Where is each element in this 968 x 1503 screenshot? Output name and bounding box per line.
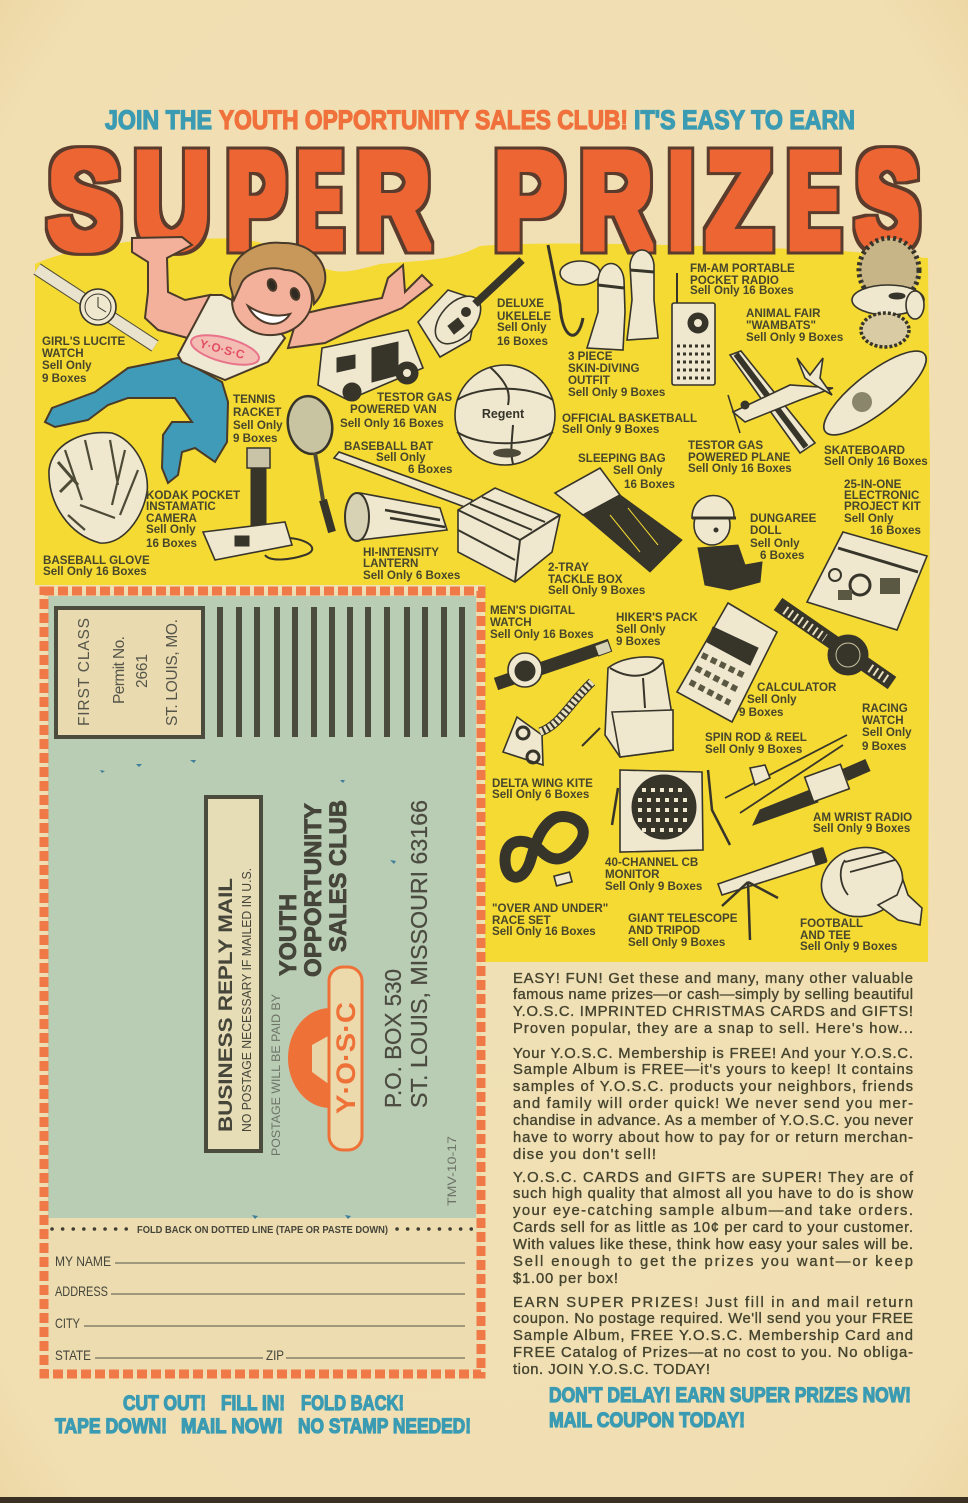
address: P.O. BOX 530 [380, 969, 406, 1108]
paragraph: membership: Sample Album is FREE—it's yours to keep! It contains [513, 1062, 913, 1078]
paragraph: cards and gifts: your eye-catching sample album—and take orders. [513, 1203, 913, 1219]
prize: men's digital watch: WATCH [490, 616, 532, 629]
paragraph: cards and gifts: Cards sell for as little as 10¢ per card to your customer. [513, 1220, 913, 1236]
paragraph: earn super prizes: FREE Catalog of Prizes—at no cost to you. No obliga- [513, 1345, 913, 1361]
form fields: ADDRESS [55, 1283, 108, 1299]
paragraph: easy fun: Proven popular, they are a snap to sell. Here's how... [513, 1021, 913, 1037]
prize: racing watch [778, 604, 912, 753]
prize: kodak pocket instamatic camera: CAMERA [146, 512, 198, 525]
form fields: MY NAME [55, 1253, 111, 1269]
prize: men's digital watch: Sell Only 16 Boxes [490, 628, 594, 641]
club name: OPPORTUNITY [300, 803, 327, 977]
prize: spin rod and reel [705, 731, 847, 813]
title: super prizes: P [494, 124, 564, 278]
paragraph: membership: samples of Y.O.S.C. products your neighbors, friends [513, 1079, 913, 1095]
prize: 3 piece skin-diving outfit [548, 245, 665, 399]
prize: men's digital watch [490, 604, 612, 687]
prize: hiker's pack [582, 611, 698, 757]
prize: testor gas powered van: TESTOR GAS [377, 391, 452, 404]
prize: 3 piece skin-diving outfit: 3 PIECE [568, 350, 613, 363]
prize: tennis racket: Sell Only [233, 419, 283, 432]
paragraph: easy fun [513, 971, 913, 1037]
prize: football and tee: AND TEE [800, 929, 851, 942]
prize: 2-tray tackle box: TACKLE BOX [548, 573, 623, 586]
club name: SALES CLUB [325, 800, 352, 952]
prize: men's digital watch: MEN'S DIGITAL [490, 604, 575, 617]
paragraph: membership: dise you don't sell! [513, 1147, 656, 1163]
prize: 40-channel cb monitor [605, 770, 730, 893]
prize: official basketball: Sell Only 9 Boxes [562, 423, 659, 436]
headline: join the club: IT'S EASY TO EARN [634, 105, 855, 135]
prize: giant telescope and tripod [628, 848, 827, 949]
prize: 25-in-one electronic project kit [807, 478, 927, 630]
panel: yellow prize background [35, 238, 930, 962]
prize: kodak pocket instamatic camera: 16 Boxes [146, 537, 197, 550]
prize: football and tee [800, 839, 922, 953]
prize: racing watch: RACING [862, 702, 908, 715]
prize: racing watch: Sell Only [862, 726, 912, 739]
prize: deluxe ukelele: Sell Only [497, 321, 547, 334]
business reply mail box [206, 797, 261, 1151]
paragraph: membership [513, 1046, 913, 1163]
paragraph: easy fun: Y.O.S.C. IMPRINTED CHRISTMAS CARDS and GIFTS! [513, 1004, 913, 1020]
prize: tennis racket [233, 393, 337, 532]
call to action [549, 1384, 911, 1432]
prize: deluxe ukelele: 16 Boxes [497, 335, 548, 348]
prize: hi-intensity lantern [345, 493, 460, 582]
paragraph: earn super prizes [513, 1295, 913, 1378]
prize: testor gas powered van: POWERED VAN [350, 403, 437, 416]
prize: dungaree doll: 6 Boxes [760, 549, 804, 562]
prize: 40-channel cb monitor: MONITOR [605, 868, 660, 881]
form fields: CITY [55, 1315, 81, 1331]
title: super prizes: Z [706, 124, 772, 278]
prize: baseball bat: 6 Boxes [408, 463, 452, 476]
prize: 3 piece skin-diving outfit: OUTFIT [568, 374, 610, 387]
prize: girl's lucite watch: Sell Only [42, 359, 92, 372]
paragraph: membership: Your Y.O.S.C. Membership is FREE! And your Y.O.S.C. [513, 1046, 913, 1062]
paragraph: membership: chandise in advance. As a member of Y.O.S.C. you never [513, 1113, 913, 1129]
coupon instructions: FILL IN! [221, 1392, 285, 1415]
prize: dungaree doll: DUNGAREE [750, 512, 817, 525]
mascot: leaping boy [45, 237, 432, 483]
paragraph: cards and gifts [513, 1170, 914, 1287]
prize: over and under race set: "OVER AND UNDER" [492, 902, 608, 915]
prize: giant telescope and tripod: AND TRIPOD [628, 924, 700, 937]
prize: racing watch: 9 Boxes [862, 740, 906, 753]
prize: 25-in-one electronic project kit: PROJECT KIT [844, 500, 921, 513]
prize: dungaree doll [692, 496, 817, 590]
prize: girl's lucite watch: GIRL'S LUCITE [42, 335, 126, 348]
prize: football and tee: FOOTBALL [800, 917, 863, 930]
paragraph: membership: have to worry about how to pay for or return merchan- [513, 1130, 913, 1146]
paragraph: cards and gifts: Sell enough to get the prizes you want—or keep [513, 1254, 913, 1270]
coupon instructions [55, 1392, 471, 1438]
title: super prizes: E [298, 124, 342, 278]
prize: am wrist radio: AM WRIST RADIO [813, 811, 912, 824]
prize: testor gas powered van: Sell Only 16 Boxes [340, 417, 444, 430]
logo: y.o.s.c.: Y·O·S·C [331, 1002, 361, 1114]
prize: 40-channel cb monitor: Sell Only 9 Boxes [605, 880, 702, 893]
prize: spin rod and reel: Sell Only 9 Boxes [705, 743, 802, 756]
prize: kodak pocket instamatic camera: INSTAMATIC [146, 500, 216, 513]
paragraph: earn super prizes: Sample Album, FREE Y.O.S.C. Membership Card and [513, 1328, 913, 1344]
prize: over and under race set: RACE SET [492, 914, 551, 927]
permit box: 2661 [134, 654, 151, 688]
postage line: POSTAGE WILL BE PAID BY [271, 994, 283, 1156]
prize: hi-intensity lantern: HI-INTENSITY [363, 546, 439, 559]
prize: delta wing kite [492, 682, 593, 801]
call to action: MAIL COUPON TODAY! [549, 1409, 745, 1432]
prize: calculator: CALCULATOR [757, 681, 837, 694]
prize: 25-in-one electronic project kit: 25-IN-ONE [844, 478, 902, 491]
coupon instructions: CUT OUT! [123, 1392, 206, 1415]
prize: fm-am portable pocket radio [672, 262, 795, 385]
prize: skateboard [813, 338, 937, 468]
headline: join the club: YOUTH OPPORTUNITY SALES CLUB! [219, 105, 628, 135]
prize: 25-in-one electronic project kit: ELECTRONIC [844, 489, 920, 502]
fold line instruction: FOLD BACK ON DOTTED LINE (TAPE OR PASTE DOWN) [137, 1224, 388, 1236]
prize: baseball bat: Sell Only [376, 451, 426, 464]
prize: sleeping bag: SLEEPING BAG [578, 452, 666, 465]
prize: hiker's pack: Sell Only [616, 623, 666, 636]
prize: testor gas powered plane: POWERED PLANE [688, 451, 791, 464]
prize: fm-am portable pocket radio: Sell Only 16 Boxes [690, 284, 794, 297]
prize: giant telescope and tripod: GIANT TELESCOPE [628, 912, 738, 925]
form fields [55, 1253, 465, 1363]
prize: sleeping bag: 16 Boxes [624, 478, 675, 491]
prize: dungaree doll: Sell Only [750, 537, 800, 550]
prize: calculator: Sell Only [747, 693, 797, 706]
prize: delta wing kite: Sell Only 6 Boxes [492, 788, 589, 801]
prize: 25-in-one electronic project kit: Sell Only [844, 512, 894, 525]
club name: YOUTH [275, 894, 302, 976]
prize: testor gas powered plane [688, 351, 833, 475]
business reply mail box: NO POSTAGE NECESSARY IF MAILED IN U.S. [240, 868, 254, 1132]
form fields: STATE [55, 1347, 91, 1363]
paragraph: earn super prizes: EARN SUPER PRIZES! Just fill in and mail return [513, 1295, 913, 1311]
prize: kodak pocket instamatic camera: KODAK POCKET [146, 489, 240, 502]
paragraph: easy fun: famous name prizes—or cash—simply by selling beautiful [513, 987, 913, 1003]
coupon instructions: TAPE DOWN! [55, 1415, 167, 1438]
headline: join the club [105, 105, 855, 135]
headline: join the club: JOIN THE [105, 105, 212, 135]
prize: giant telescope and tripod: Sell Only 9 Boxes [628, 936, 725, 949]
postal bars [217, 607, 465, 737]
paragraph: cards and gifts: With values like these, think how easy your sales will be. [513, 1237, 913, 1253]
title: super prizes: S [48, 124, 121, 278]
prize: tennis racket: 9 Boxes [233, 432, 277, 445]
panel: reply coupon [44, 591, 481, 1374]
prize: spin rod and reel: SPIN ROD & REEL [705, 731, 807, 744]
prize: fm-am portable pocket radio: POCKET RADIO [690, 274, 779, 287]
prize: baseball glove [43, 433, 150, 578]
title: super prizes: S [856, 124, 919, 278]
prize: 2-tray tackle box [458, 488, 645, 597]
prize: animal fair wambats [746, 238, 924, 347]
business reply mail box: BUSINESS REPLY MAIL [216, 878, 237, 1132]
prize: deluxe ukelele: UKELELE [497, 310, 551, 323]
prize: sleeping bag: Sell Only [613, 464, 663, 477]
permit box: ST. LOUIS, MO. [164, 619, 181, 726]
prize: deluxe ukelele: DELUXE [497, 297, 544, 310]
prize: official basketball: OFFICIAL BASKETBALL [562, 412, 697, 425]
prize: girl's lucite watch [37, 269, 155, 385]
title: super prizes: P [227, 124, 285, 278]
prize: animal fair wambats: ANIMAL FAIR [746, 307, 821, 320]
prize: hi-intensity lantern: Sell Only 6 Boxes [363, 569, 460, 582]
title: super prizes: R [356, 124, 430, 278]
prize: 3 piece skin-diving outfit: SKIN-DIVING [568, 362, 640, 375]
club name [275, 800, 352, 977]
title: super prizes: R [580, 124, 652, 278]
paragraph: easy fun: EASY! FUN! Get these and many, many other valuable [513, 971, 913, 987]
prize: baseball bat: BASEBALL BAT [344, 440, 433, 453]
prize: girl's lucite watch: WATCH [42, 347, 84, 360]
body copy [513, 971, 914, 1378]
title: super prizes: U [134, 124, 210, 278]
prize: am wrist radio [753, 764, 912, 835]
paragraph: cards and gifts: such high quality that almost all you have to do is show [513, 1186, 913, 1202]
permit box: Permit No. [111, 636, 128, 704]
prize: 2-tray tackle box: 2-TRAY [548, 561, 589, 574]
prize: tennis racket: TENNIS [233, 393, 276, 406]
paragraph: cards and gifts: $1.00 per box! [513, 1271, 618, 1287]
coupon instructions: NO STAMP NEEDED! [298, 1415, 471, 1438]
paragraph: cards and gifts: Y.O.S.C. CARDS and GIFTS are SUPER! They are of [513, 1170, 914, 1186]
paragraph: membership: and family will order quick! We never send you mer- [513, 1096, 913, 1112]
prize: skateboard: SKATEBOARD [824, 444, 905, 457]
prize: baseball bat [334, 440, 472, 509]
prize: 40-channel cb monitor: 40-CHANNEL CB [605, 856, 698, 869]
prize: delta wing kite: DELTA WING KITE [492, 777, 593, 790]
title: super prizes: I [668, 124, 694, 278]
coupon instructions: FOLD BACK! [301, 1392, 404, 1415]
prize: calculator [677, 603, 837, 722]
code: TMV-10-17 [447, 1136, 459, 1206]
prize: hiker's pack: 9 Boxes [616, 635, 660, 648]
coupon instructions: MAIL NOW! [181, 1415, 283, 1438]
address: ST. LOUIS, MISSOURI 63166 [406, 800, 432, 1108]
permit box: FIRST CLASS [76, 618, 93, 726]
paragraph: earn super prizes: tion. JOIN Y.O.S.C. TODAY! [513, 1362, 710, 1378]
prize: official basketball [455, 365, 697, 465]
prize: over and under race set [492, 817, 608, 938]
prize: sleeping bag [555, 452, 682, 572]
prize: hiker's pack: HIKER'S PACK [616, 611, 698, 624]
permit box [56, 608, 203, 737]
mascot: leaping boy: Y·O·S·C [198, 337, 246, 362]
prize: official basketball: Regent [482, 407, 525, 421]
paragraph: earn super prizes: coupon. No postage required. We'll send you your FREE [513, 1311, 913, 1327]
prize: calculator: 9 Boxes [739, 706, 783, 719]
title: super prizes: E [788, 124, 840, 278]
prize: animal fair wambats: "WAMBATS" [746, 319, 816, 332]
prize: fm-am portable pocket radio: FM-AM PORTABLE [690, 262, 795, 275]
form fields: ZIP [266, 1347, 284, 1363]
prize: am wrist radio: Sell Only 9 Boxes [813, 822, 910, 835]
prize: baseball glove: Sell Only 16 Boxes [43, 565, 147, 578]
prize: dungaree doll: DOLL [750, 524, 782, 537]
prize: 25-in-one electronic project kit: 16 Boxes [870, 524, 921, 537]
prize: kodak pocket instamatic camera: Sell Only [146, 523, 196, 536]
prize: animal fair wambats: Sell Only 9 Boxes [746, 331, 843, 344]
prize: hi-intensity lantern: LANTERN [363, 557, 418, 570]
prize: kodak pocket instamatic camera [146, 448, 312, 560]
prize: 2-tray tackle box: Sell Only 9 Boxes [548, 584, 645, 597]
prize: baseball glove: BASEBALL GLOVE [43, 554, 150, 567]
prize: football and tee: Sell Only 9 Boxes [800, 940, 897, 953]
prize: deluxe ukelele [418, 260, 551, 357]
prize: girl's lucite watch: 9 Boxes [42, 372, 86, 385]
prize: testor gas powered van [318, 330, 452, 430]
prize: testor gas powered plane: Sell Only 16 Boxes [688, 462, 792, 475]
prize: 3 piece skin-diving outfit: Sell Only 9 Boxes [568, 386, 665, 399]
address [380, 800, 432, 1108]
prize: testor gas powered plane: TESTOR GAS [688, 439, 763, 452]
logo: y.o.s.c. [288, 967, 362, 1150]
prize: tennis racket: RACKET [233, 406, 281, 419]
prize: racing watch: WATCH [862, 714, 904, 727]
title: super prizes [48, 124, 919, 278]
prize: skateboard: Sell Only 16 Boxes [824, 455, 928, 468]
prize: over and under race set: Sell Only 16 Boxes [492, 925, 596, 938]
